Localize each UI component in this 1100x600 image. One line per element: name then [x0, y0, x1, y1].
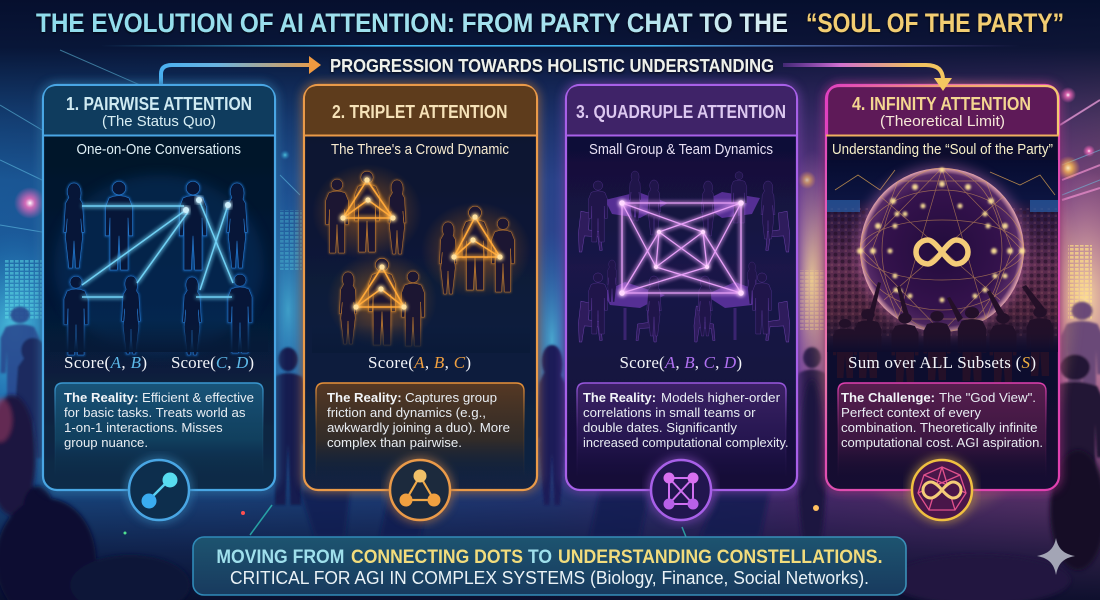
card 2 reality box: Captures group: [405, 391, 497, 405]
icon: triangle of nodes: [390, 460, 450, 520]
arrow: progression start: [161, 56, 321, 85]
illustration: team tables with network: [578, 171, 790, 342]
banner subline: CRITICAL FOR AGI IN COMPLEX SYSTEMS (Biology, Finance, Social Networks).: [230, 568, 869, 588]
card 1 reality box: group nuance.: [64, 436, 148, 450]
card 1 reality box: Efficient & effective: [142, 391, 254, 405]
card 4 heading: [852, 94, 1031, 130]
progression label: PROGRESSION TOWARDS HOLISTIC UNDERSTANDING: [330, 55, 774, 76]
card 2 reality box: The Reality:: [327, 391, 402, 405]
card 1 heading: (The Status Quo): [102, 114, 216, 130]
card 4 heading: (Theoretical Limit): [880, 114, 1005, 130]
banner headline: [216, 546, 882, 568]
card 4 challenge box: computational cost. AGI aspiration.: [841, 436, 1043, 450]
card 2 subheading: The Three's a Crowd Dynamic: [331, 142, 509, 158]
illustration: triplets with triangles: [312, 164, 531, 353]
card 3 subheading: Small Group & Team Dynamics: [589, 142, 773, 158]
card 2 reality box: [316, 383, 524, 478]
banner headline: MOVING FROM: [216, 546, 344, 568]
card 1 heading: 1. PAIRWISE ATTENTION: [66, 94, 252, 114]
banner headline: TO: [528, 546, 552, 568]
card 1 subheading: One-on-One Conversations: [76, 142, 241, 158]
icon: sparkle: [1037, 538, 1075, 575]
card 1 formulas: Score(A, B): [64, 353, 147, 372]
icon: four connected nodes: [651, 460, 711, 520]
card 1 reality box: for basic tasks. Treats world as: [64, 406, 246, 420]
title: “SOUL OF THE PARTY”: [806, 8, 1064, 38]
card 2 heading: 2. TRIPLET ATTENTION: [332, 102, 508, 122]
panel: card 1 pairwise: [43, 85, 275, 520]
card 1 formulas: Score(C, D): [171, 353, 254, 372]
panel: card 2 triplet: [304, 85, 537, 520]
card 3 reality box: double dates. Significantly: [583, 421, 738, 435]
banner headline: UNDERSTANDING CONSTELLATIONS.: [558, 546, 882, 568]
card 2 formula: Score(A, B, C): [368, 353, 471, 372]
card 4 challenge box: Perfect context of every: [841, 406, 982, 420]
card 2 reality box: awkwardly joining a duo). More: [327, 421, 510, 435]
card 4 heading: 4. INFINITY ATTENTION: [852, 94, 1031, 114]
title: THE EVOLUTION OF AI ATTENTION: FROM PARTY CHAT TO THE: [36, 8, 788, 38]
card 4 subheading: Understanding the “Soul of the Party”: [832, 142, 1053, 158]
panel: card 4 infinity: [810, 85, 1074, 520]
card 3 heading: 3. QUADRUPLE ATTENTION: [576, 102, 786, 122]
card 2 reality box: friction and dynamics (e.g.,: [327, 406, 486, 420]
card 1 heading: [66, 94, 252, 130]
card 3 reality box: correlations in small teams or: [583, 406, 756, 420]
card 1 reality box: 1-on-1 interactions. Misses: [64, 421, 223, 435]
card 1 reality box: The Reality:: [64, 391, 138, 405]
illustration: crowd under infinity sphere: [827, 160, 1058, 382]
arrow: progression end: [783, 65, 952, 91]
card 4 challenge box: The "God View".: [939, 391, 1036, 405]
card 1 formulas: [64, 353, 254, 372]
panel: card 3 quadruple: [566, 85, 797, 520]
card 1 reality box: [55, 383, 263, 478]
illustration: pairs connected: [50, 175, 268, 355]
card 3 reality box: The Reality:: [583, 391, 656, 405]
banner headline: CONNECTING DOTS: [351, 546, 523, 568]
card 3 reality box: [577, 383, 788, 478]
icon: two connected nodes: [129, 460, 189, 520]
card 3 formula: Score(A, B, C, D): [620, 353, 742, 372]
card 4 challenge box: The Challenge:: [841, 391, 935, 405]
icon: infinity in network: [912, 460, 972, 520]
card 4 formula: Sum over ALL Subsets (S): [848, 353, 1036, 372]
card 4 challenge box: combination. Theoretically infinite: [841, 421, 1038, 435]
card 2 reality box: complex than pairwise.: [327, 436, 462, 450]
card 3 reality box: increased computational complexity.: [583, 436, 788, 450]
card 4 challenge box: [838, 383, 1046, 478]
banner: conclusion: [193, 537, 906, 595]
card 3 reality box: Models higher-order: [661, 391, 780, 405]
